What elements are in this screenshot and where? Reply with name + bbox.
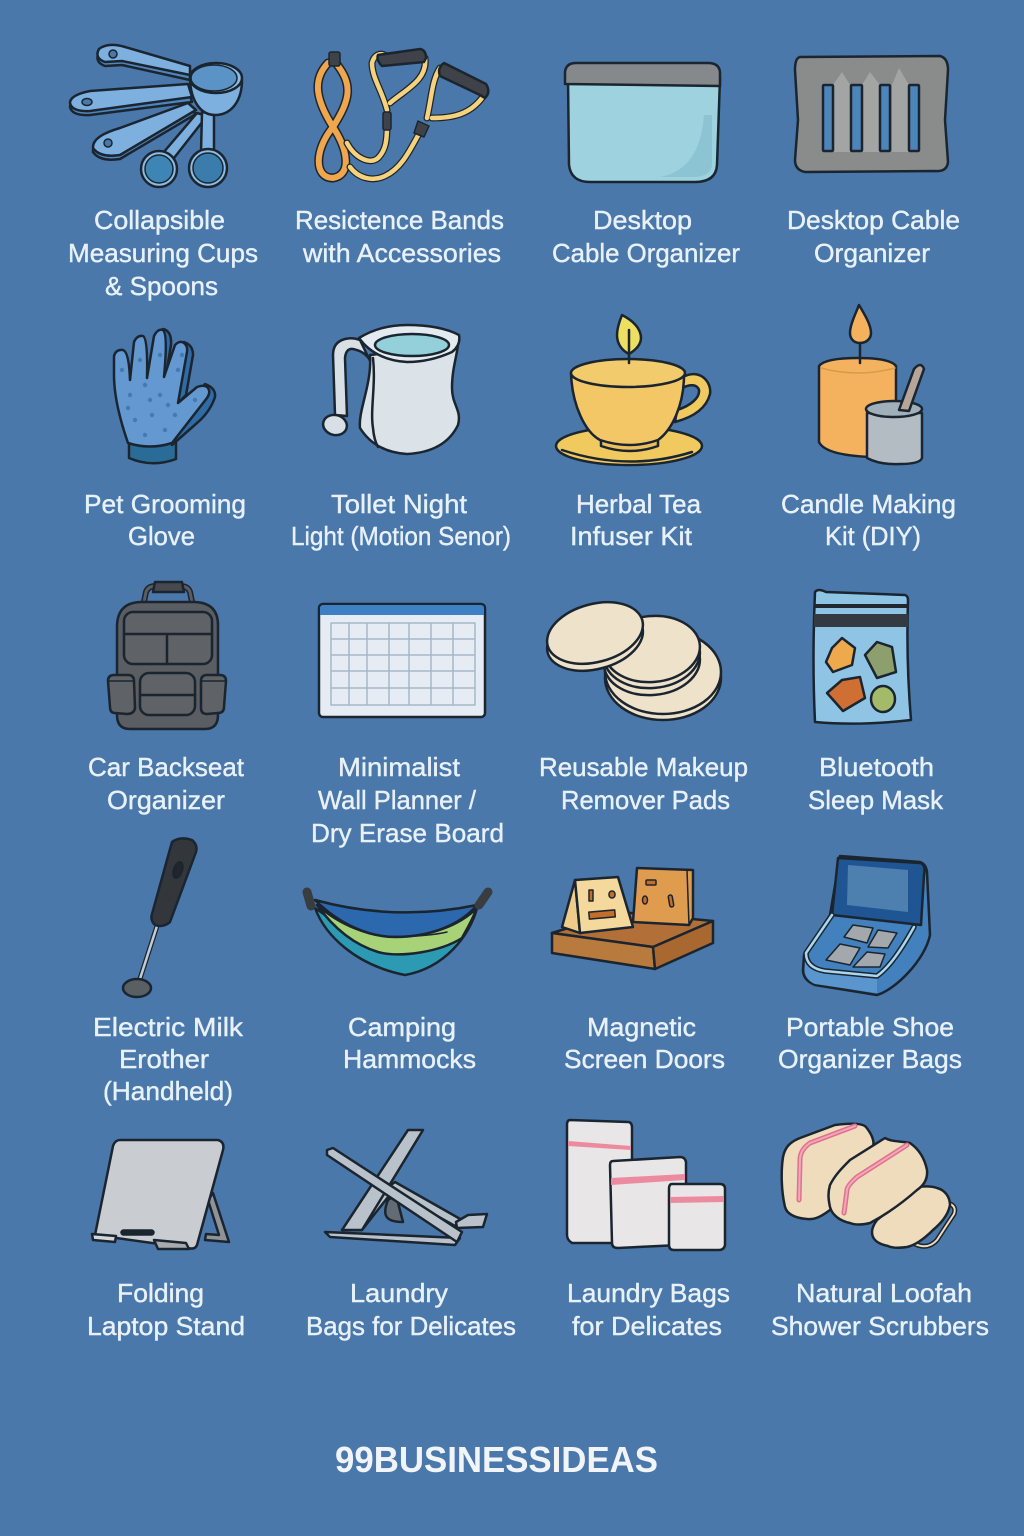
item: folding laptop stand: [87, 1140, 245, 1341]
icon: pouch with pieces: [814, 590, 911, 724]
label: Herbal Tea: [576, 489, 702, 519]
label: Glove: [128, 521, 195, 551]
item: laundry bags: [567, 1120, 730, 1341]
icon: candle and cup: [819, 305, 924, 464]
label: [552, 205, 740, 268]
item: desktop cable organizer 2: [787, 56, 960, 268]
label: [808, 752, 944, 815]
label: [771, 1278, 989, 1341]
item: herbal tea infuser kit: [556, 315, 710, 551]
label: Organizer: [814, 238, 930, 268]
label: [570, 489, 702, 551]
label: [781, 489, 956, 551]
label: [68, 205, 258, 301]
icon: wooden blocks: [552, 868, 713, 969]
icon: frother: [123, 838, 196, 997]
label: Erother: [119, 1044, 209, 1074]
label: Candle Making: [781, 489, 956, 519]
item: camping hammocks: [307, 892, 488, 1074]
icon: backpack: [108, 582, 226, 729]
item: aluminum stand labelled laundry bags: [306, 1130, 516, 1341]
label: Resictence Bands: [295, 205, 504, 235]
label: Natural Loofah: [796, 1278, 972, 1308]
label: Dry Erase Board: [311, 818, 504, 848]
label: Hammocks: [343, 1044, 476, 1074]
icon: glove: [114, 329, 215, 463]
icon: tea cup with leaf: [556, 315, 710, 465]
icon: tablet-style stand: [92, 1140, 229, 1249]
label: Organizer Bags: [778, 1044, 962, 1074]
label: [787, 205, 960, 268]
label: Cable Organizer: [552, 238, 740, 268]
item: candle making kit: [781, 305, 956, 551]
icon: hammock: [307, 892, 488, 975]
icon: stacked pads: [540, 592, 721, 720]
icon: planner board: [319, 604, 485, 717]
label: Tollet Night: [331, 489, 468, 519]
item: wall planner: [311, 604, 504, 848]
label: [88, 752, 245, 815]
label: [87, 1278, 245, 1341]
label: Light (Motion Senor): [291, 521, 511, 551]
icon: adjustable stand: [325, 1130, 487, 1245]
label: Folding: [117, 1278, 204, 1308]
item: measuring cups: [68, 45, 258, 301]
icon: three mesh bags: [567, 1120, 725, 1250]
label: Shower Scrubbers: [771, 1311, 989, 1341]
item: portable shoe organizer: [778, 856, 962, 1074]
label: Laundry: [350, 1278, 448, 1308]
label: Electric Milk: [93, 1012, 244, 1042]
item: reusable makeup pads: [539, 592, 748, 815]
label: [84, 489, 246, 551]
item: toilet night light: [291, 325, 511, 551]
label: Wall Planner /: [318, 785, 477, 815]
label: [343, 1012, 476, 1074]
icon: slotted cable block: [795, 56, 948, 172]
label: Reusable Makeup: [539, 752, 748, 782]
item: car backseat organizer: [88, 582, 245, 815]
icon: pouch: [565, 63, 720, 182]
label: Infuser Kit: [570, 521, 693, 551]
item: electric milk frother: [93, 838, 244, 1106]
item: magnetic screen doors: [552, 868, 725, 1074]
item: pet grooming glove: [84, 329, 246, 551]
label: Desktop: [593, 205, 692, 235]
icon: resistance bands: [318, 49, 488, 179]
label: Sleep Mask: [808, 785, 944, 815]
label: [306, 1278, 516, 1341]
footer brand: 99BUSINESSIDEAS: [335, 1439, 658, 1480]
label: Pet Grooming: [84, 489, 246, 519]
label: Organizer: [107, 785, 225, 815]
icon: night light mug: [321, 325, 459, 454]
icon: open organizer case: [803, 856, 930, 995]
label: Camping: [348, 1012, 456, 1042]
label: [564, 1012, 725, 1074]
label: Laptop Stand: [87, 1311, 245, 1341]
label: Magnetic: [587, 1012, 696, 1042]
label: [311, 752, 504, 848]
label: Laundry Bags: [567, 1278, 730, 1308]
icon: measuring cups and spoons: [70, 45, 242, 187]
label: Car Backseat: [88, 752, 245, 782]
label: [291, 489, 511, 551]
label: Bluetooth: [819, 752, 934, 782]
label: Screen Doors: [564, 1044, 725, 1074]
item: natural loofah scrubbers: [771, 1124, 989, 1341]
label: Remover Pads: [561, 785, 730, 815]
label: with Accessories: [302, 238, 501, 268]
label: for Delicates: [572, 1311, 722, 1341]
icon: loofah sponges: [782, 1124, 955, 1248]
label: Kit (DIY): [825, 521, 921, 551]
label: Portable Shoe: [786, 1012, 954, 1042]
item: bluetooth sleep mask: [808, 590, 944, 815]
label: & Spoons: [105, 271, 218, 301]
label: Collapsible: [94, 205, 225, 235]
label: [93, 1012, 244, 1106]
item: resistance bands: [295, 49, 504, 268]
label: Minimalist: [338, 752, 461, 782]
label: (Handheld): [103, 1076, 233, 1106]
label: [567, 1278, 730, 1341]
label: [539, 752, 748, 815]
label: Bags for Delicates: [306, 1311, 516, 1341]
label: [295, 205, 504, 268]
label: [778, 1012, 962, 1074]
item: desktop cable organizer 1: [552, 63, 740, 268]
label: Measuring Cups: [68, 238, 258, 268]
label: Desktop Cable: [787, 205, 960, 235]
